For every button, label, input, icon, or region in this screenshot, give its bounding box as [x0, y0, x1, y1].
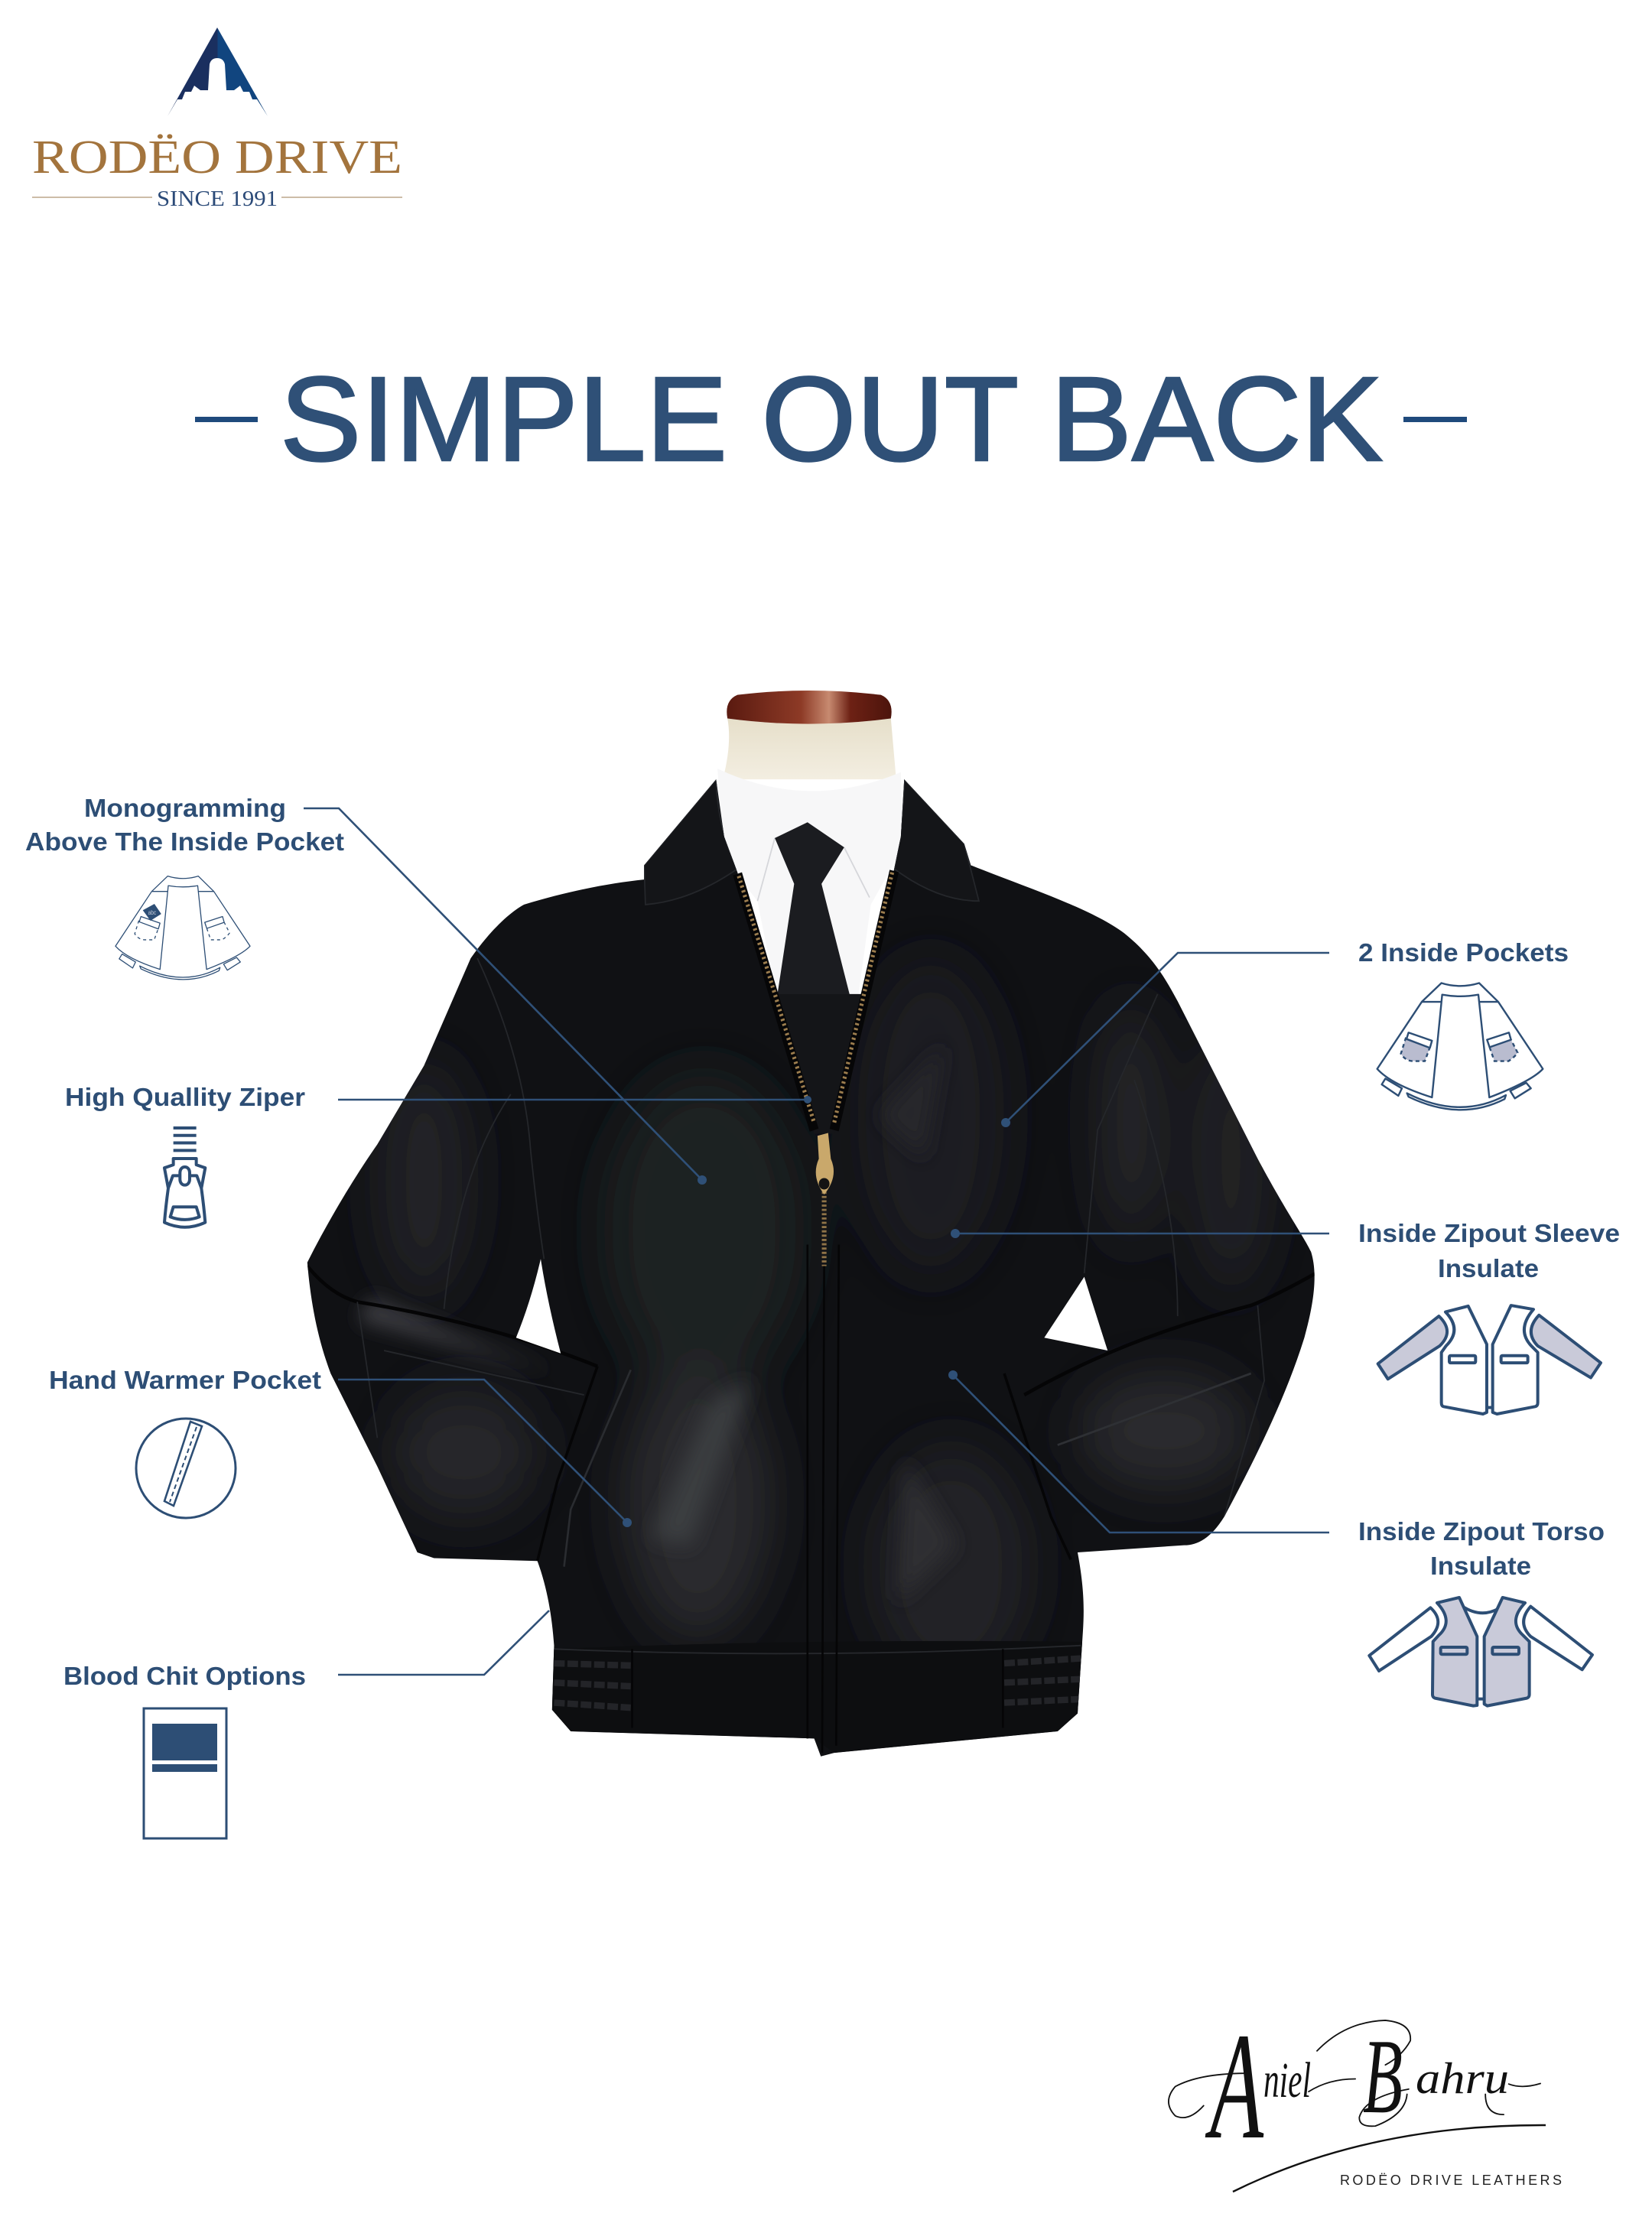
right sleeve seams and pocket stitching	[1004, 994, 1315, 1559]
callout: 2 Inside Pockets	[1001, 938, 1569, 1127]
callout: Blood Chit Options: Blood Chit Options	[63, 1662, 306, 1690]
callout: Inside Zipout Torso Insulate: Insulate	[1430, 1552, 1531, 1580]
wood neck cap	[727, 691, 892, 724]
logo wordmark: RODËO DRIVE	[32, 132, 402, 184]
icon: zipper pull	[164, 1128, 205, 1227]
icon: open jacket with monogram	[115, 876, 250, 980]
callout: Inside Zipout Torso Insulate	[948, 1370, 1605, 1580]
callout: High Quality Zipper	[65, 1083, 811, 1111]
signature: niel	[1263, 2053, 1311, 2108]
icon: blood chit	[144, 1708, 226, 1838]
icon: open jacket with monogram: abc	[148, 908, 156, 916]
left sleeve seams and pocket stitching	[307, 958, 631, 1567]
icon: jacket with insulated torso	[1369, 1598, 1592, 1706]
callout: Monogramming	[25, 794, 707, 1185]
title: SIMPLE OUT BACK	[280, 353, 1383, 486]
callout: Hand Warmer Pocket: Hand Warmer Pocket	[49, 1366, 321, 1394]
logo: Rodeo Drive	[32, 28, 402, 211]
zipper	[737, 871, 894, 1753]
jacket silhouette	[307, 779, 1315, 1757]
signature company name: RODËO DRIVE LEATHERS	[1340, 2173, 1562, 2188]
mannequin neck	[723, 719, 896, 779]
signature underline swoosh	[1233, 2125, 1546, 2192]
callout: Hand Warmer Pocket	[49, 1366, 632, 1527]
callout: Blood Chit Options	[63, 1611, 549, 1690]
callout: Monogramming: Above The Inside Pocket	[25, 827, 344, 856]
callout: 2 Inside Pockets: 2 Inside Pockets	[1358, 938, 1569, 967]
signature: B	[1363, 2017, 1403, 2136]
logo tagline: SINCE 1991	[157, 187, 278, 211]
callout: Monogramming: Monogramming	[84, 794, 286, 822]
gaps between arms and torso	[516, 1259, 1107, 1354]
shirt collar	[717, 769, 902, 1001]
callout: Inside Zipout Torso Insulate: Inside Zipout Torso	[1358, 1517, 1605, 1546]
signature flourishes	[1169, 2020, 1540, 2126]
icon: logo peak	[167, 28, 268, 116]
icon: open jacket with inside pockets	[1377, 983, 1543, 1110]
icon: pocket welt in circle	[136, 1419, 236, 1518]
callout: High Quality Zipper: High Quallity Ziper	[65, 1083, 305, 1111]
icon: jacket with insulated sleeves	[1378, 1305, 1601, 1414]
jacket on mannequin	[307, 691, 1315, 1757]
signature: ahru	[1416, 2053, 1509, 2103]
callout: Inside Zipout Sleeve Insulate: Inside Zipout Sleeve	[1358, 1219, 1620, 1247]
signature	[1169, 2002, 1562, 2192]
collar	[644, 779, 979, 905]
callout: Inside Zipout Sleeve Insulate	[951, 1219, 1620, 1282]
tie	[775, 822, 850, 1137]
leather shading	[307, 779, 1315, 1753]
waistband	[552, 1641, 1083, 1753]
signature name: A	[1205, 2002, 1263, 2171]
callout: Inside Zipout Sleeve Insulate: Insulate	[1438, 1254, 1539, 1282]
